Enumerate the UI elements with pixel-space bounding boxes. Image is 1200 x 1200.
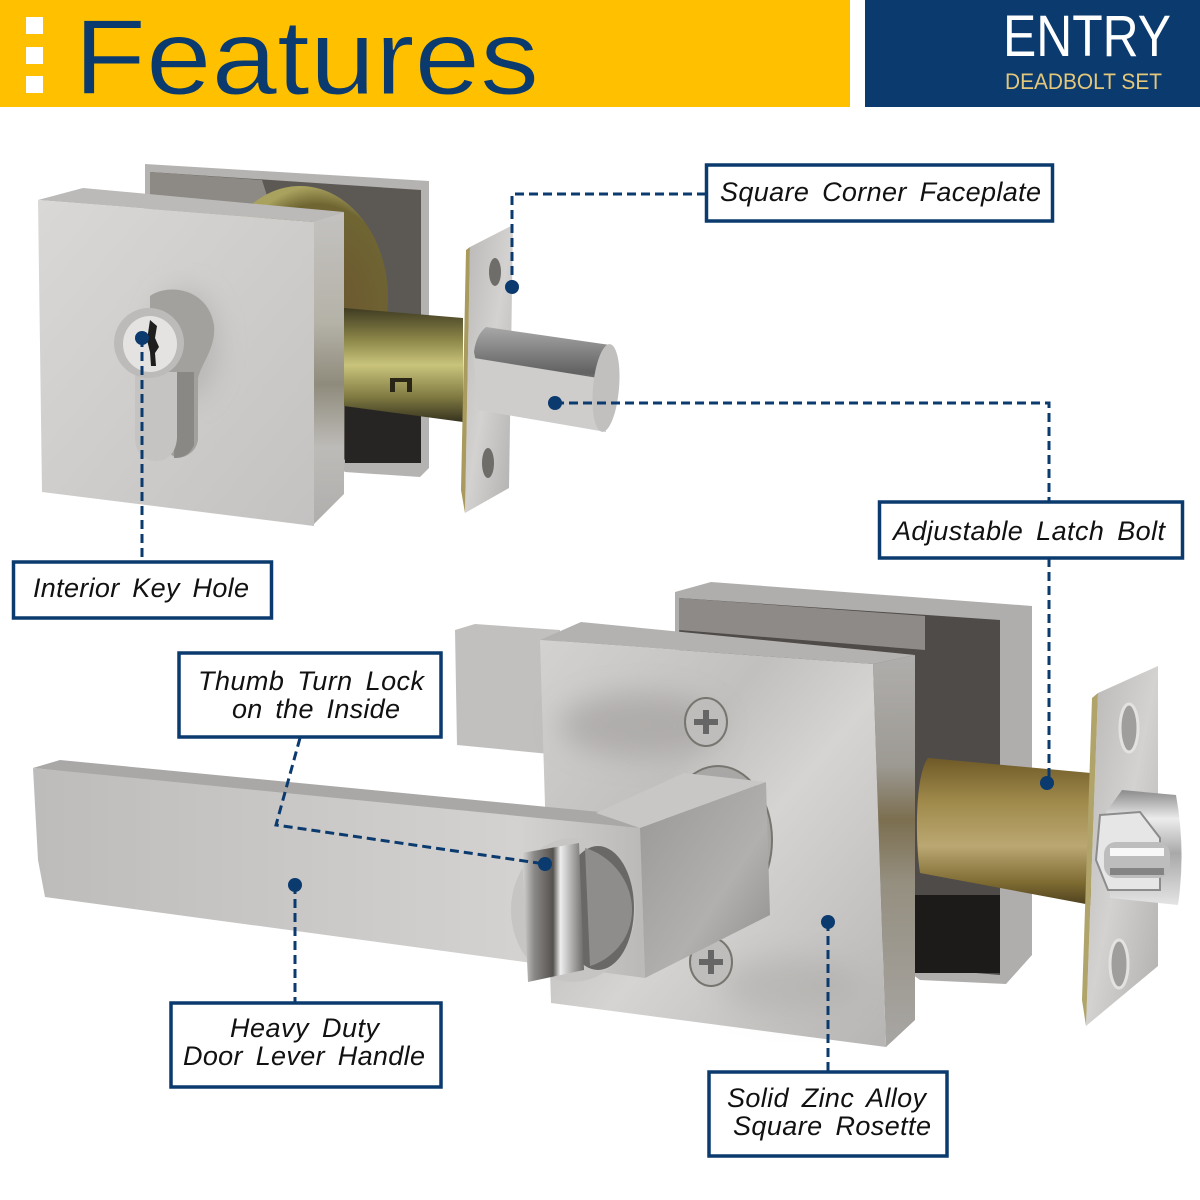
callout: Interior Key Hole: Interior Key Hole xyxy=(33,573,249,603)
callout: Solid Zinc Alloy Square Rosette: Square Rosette xyxy=(733,1111,931,1141)
callout: Thumb Turn Lock: Thumb Turn Lock xyxy=(198,666,426,696)
front plate edge xyxy=(312,212,344,526)
icon: header dots xyxy=(26,17,43,93)
badge: Entry Deadbolt Set: DEADBOLT SET xyxy=(1005,69,1162,94)
callout: Thumb Turn Lock xyxy=(179,653,552,871)
rosette edge xyxy=(873,655,915,1047)
neck top facet xyxy=(596,773,766,828)
neck side xyxy=(640,782,770,978)
strike plate xyxy=(1086,666,1158,1026)
callout: Interior Key Hole xyxy=(14,331,272,618)
callout: Heavy Duty Door Lever Handle: Door Lever Handle xyxy=(183,1041,425,1071)
callout: Heavy Duty Door Lever Handle xyxy=(171,878,441,1087)
key cylinder xyxy=(114,290,217,461)
callout: Square Corner Faceplate: Square Corner Faceplate xyxy=(720,177,1041,207)
rosette top xyxy=(540,622,915,664)
screws xyxy=(685,698,727,746)
strike plate xyxy=(465,225,513,513)
product: lever handle lock xyxy=(33,582,1182,1047)
callout: Adjustable Latch Bolt: Adjustable Latch Bolt xyxy=(891,516,1166,546)
callout: Adjustable Latch Bolt xyxy=(548,396,1182,790)
rosette face xyxy=(540,640,886,1047)
back plate xyxy=(675,582,1032,984)
callout: Square Corner Faceplate xyxy=(505,165,1052,294)
bolt housing xyxy=(344,308,463,422)
callout: Solid Zinc Alloy Square Rosette xyxy=(709,915,947,1156)
rear stub lever xyxy=(455,624,560,755)
cylinder xyxy=(917,758,1091,905)
front plate face xyxy=(38,200,314,526)
badge: Entry Deadbolt Set xyxy=(865,0,1200,107)
callout: Solid Zinc Alloy Square Rosette: Solid Zinc Alloy xyxy=(727,1083,928,1113)
title: Features xyxy=(74,0,539,117)
latch xyxy=(1096,790,1182,905)
latch bolt xyxy=(474,327,610,392)
callout: Heavy Duty Door Lever Handle: Heavy Duty xyxy=(230,1013,380,1043)
lever top xyxy=(33,760,640,828)
back plate xyxy=(145,164,429,477)
rose boss xyxy=(664,766,772,914)
header banner: Features xyxy=(0,0,850,117)
badge: Entry Deadbolt Set: ENTRY xyxy=(1003,4,1171,69)
lever face xyxy=(33,768,645,978)
product: deadbolt lock xyxy=(38,164,623,526)
callout: Thumb Turn Lock: on the Inside xyxy=(232,694,400,724)
thumb turn xyxy=(511,838,635,982)
